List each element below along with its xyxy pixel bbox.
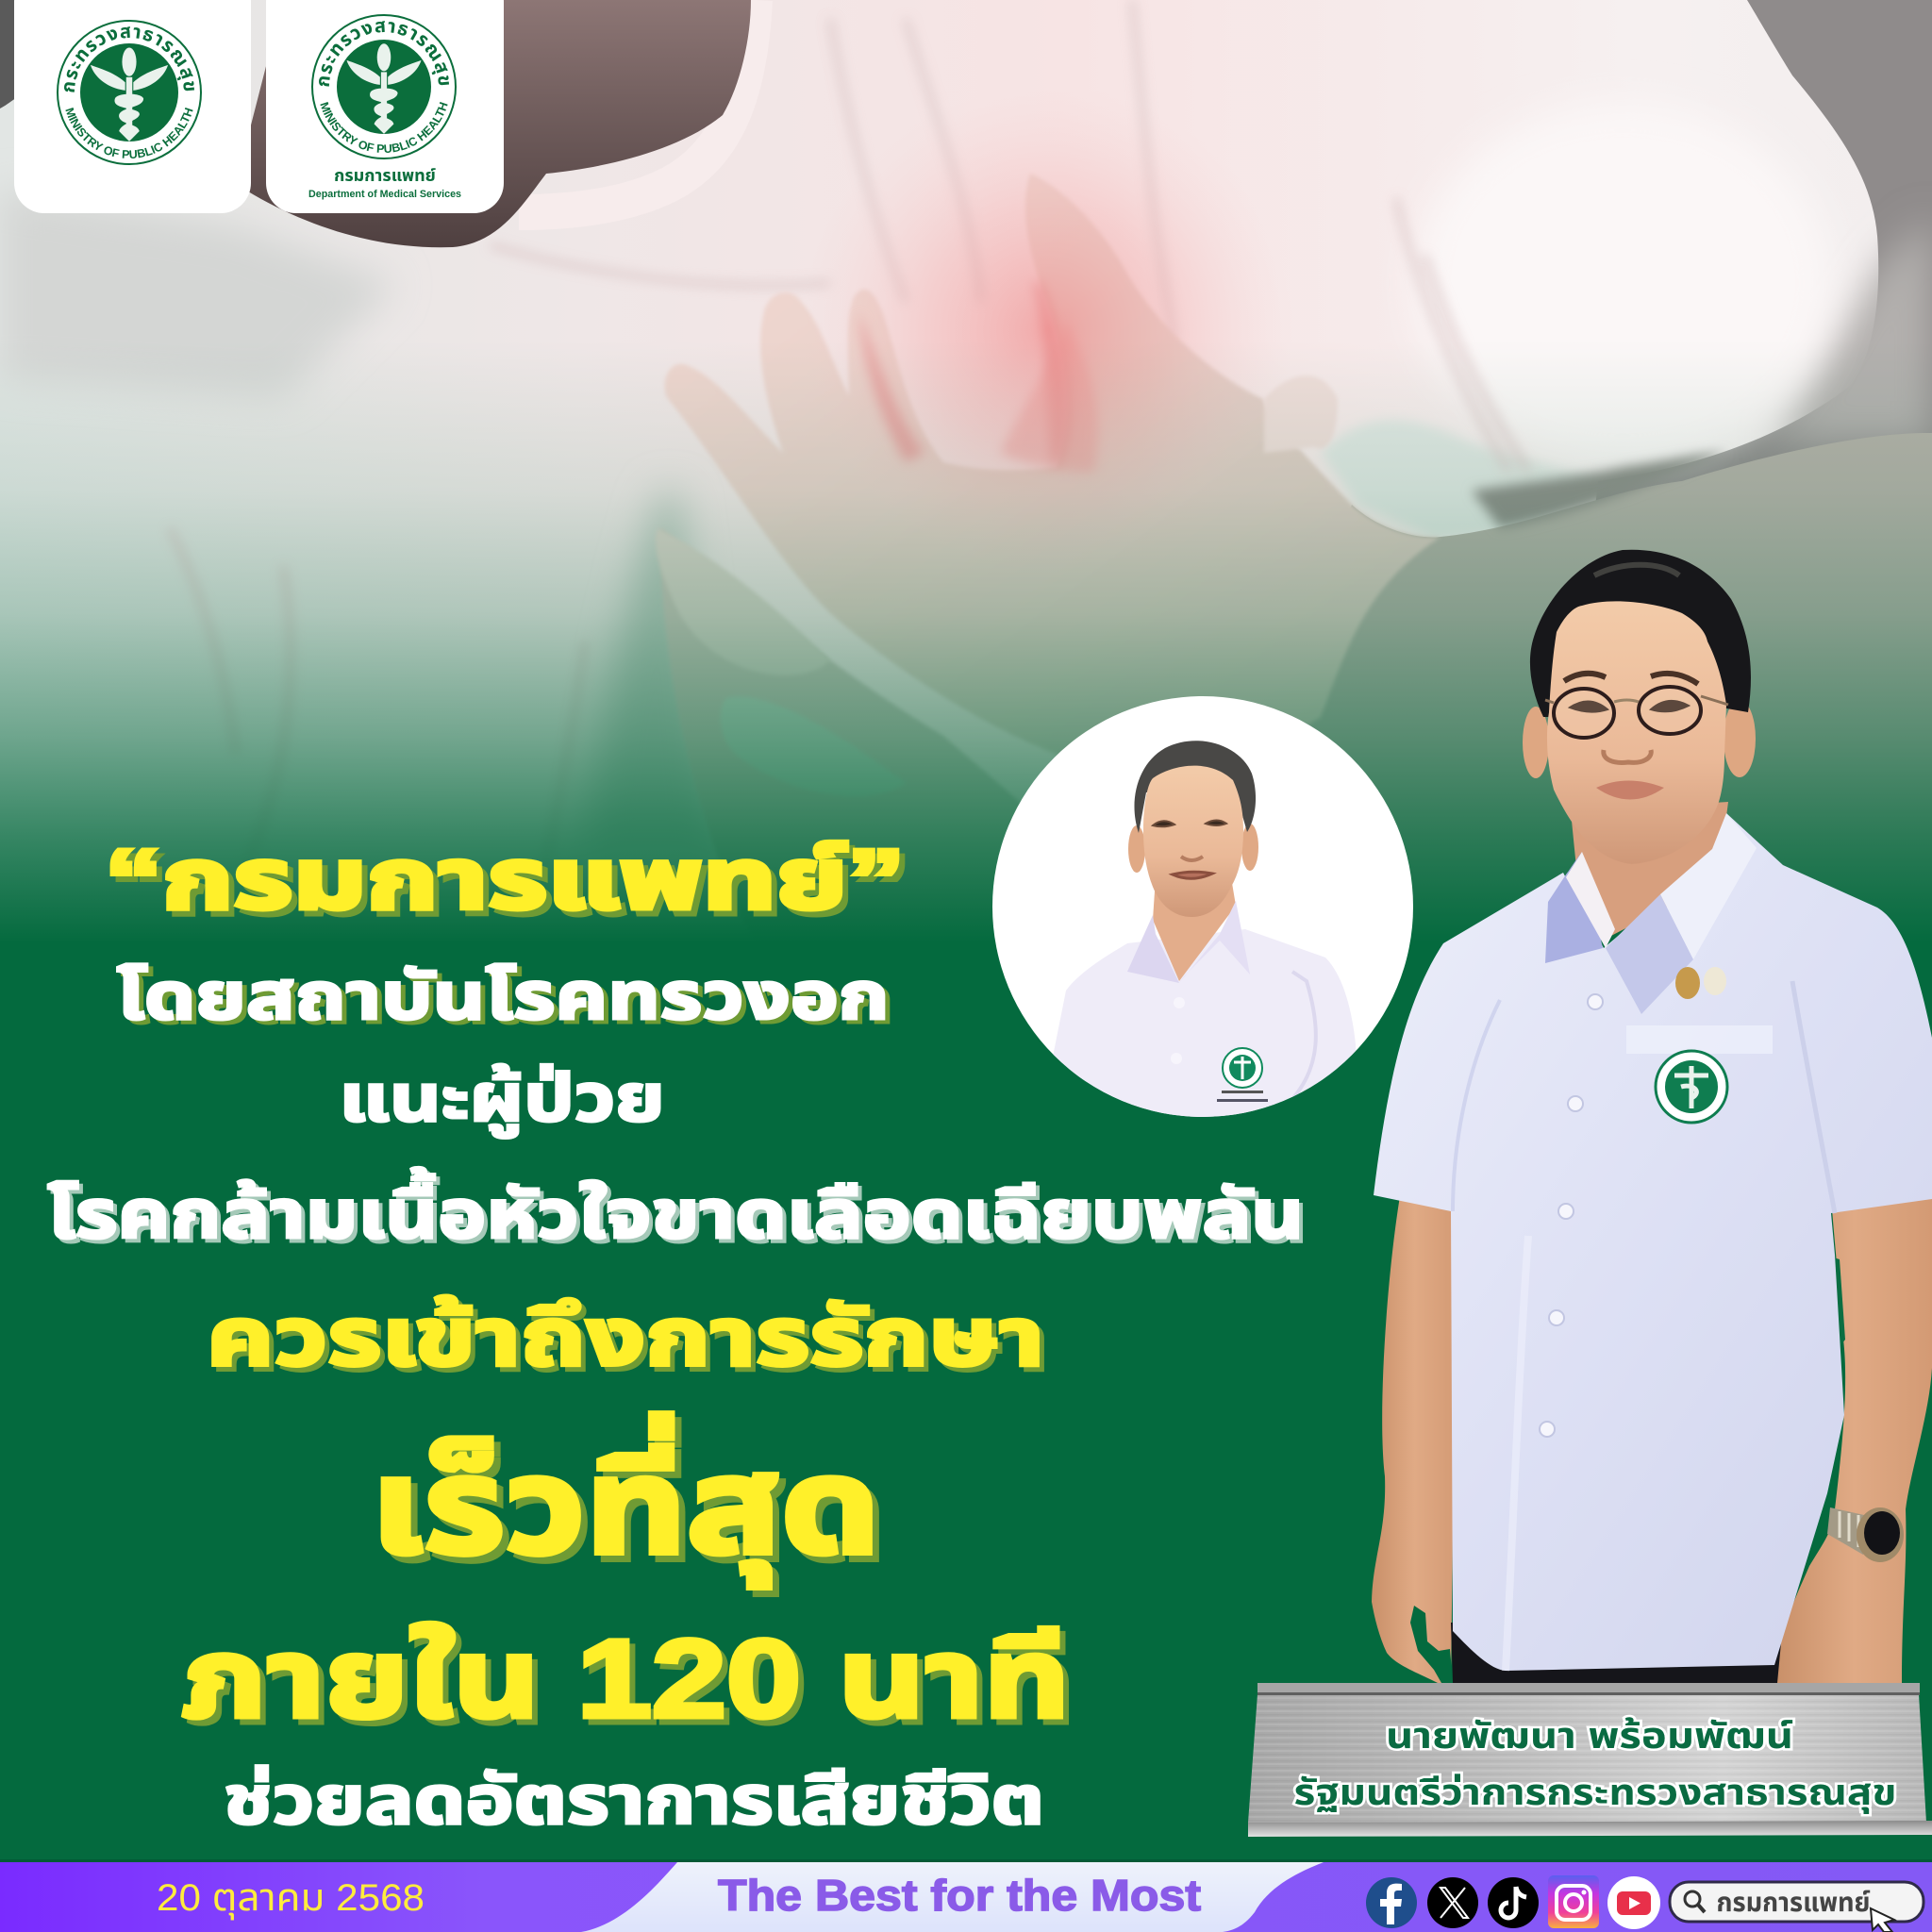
ears (1523, 707, 1549, 778)
eyes (1570, 701, 1689, 712)
line: within 120 minutes: ภายใน 120 นาที (187, 1623, 1075, 1747)
lips (1173, 872, 1212, 878)
shirt logo (1656, 1051, 1727, 1123)
hair (1530, 550, 1751, 717)
arms (1776, 1191, 1932, 1683)
line: should access treatment: ควรเข้าถึงการรักษา (207, 1292, 1044, 1383)
pocket flap (1626, 1025, 1773, 1054)
shirt (1053, 929, 1357, 1117)
placket shadow (1606, 894, 1693, 1014)
line: within 120 minutes: ภายใน 120 นาที (181, 1617, 1070, 1741)
line: condition: โรคกล้ามเนื้อหัวใจขาดเลือดเฉียบพลัน (47, 1167, 1304, 1253)
minister title: รัฐมนตรีว่าการกระทรวงสาธารณสุข (1294, 1774, 1896, 1814)
shirt logo (1223, 1048, 1262, 1088)
department name Thai: กรมการแพทย์ (334, 166, 436, 185)
face (1547, 601, 1726, 864)
shirt folds (170, 0, 1528, 906)
sleeve seams (1453, 1000, 1500, 1211)
grey backdrop right of sleeve (1547, 0, 1932, 943)
forearm (1132, 433, 1932, 943)
collar (1127, 915, 1179, 983)
logo: ministry seal: MINISTRY OF PUBLIC HEALTH (65, 108, 193, 158)
green gap near right arm (1824, 1255, 1845, 1349)
soft shirt fold at lower left (585, 491, 717, 849)
eyes (1153, 821, 1226, 826)
line: should access treatment: ควรเข้าถึงการรักษา (211, 1297, 1049, 1388)
line: condition (47, 1167, 1307, 1257)
nose (1181, 857, 1203, 860)
logo card: Department of Medical Services (266, 0, 504, 213)
pins (1675, 967, 1700, 999)
line: advises patients: แนะผู้ป่วย (340, 1061, 664, 1138)
watch (1827, 1507, 1904, 1562)
portrait circle: department director (992, 696, 1413, 1132)
hand palm (665, 174, 1441, 774)
portrait: minister (1372, 550, 1932, 1683)
headline: department name (105, 833, 910, 933)
collar ribbing (519, 0, 755, 212)
department name English: Department of Medical Services (308, 189, 461, 200)
line: institute: โดยสถาบันโรคทรวงอก (117, 959, 889, 1033)
footer bar (0, 1859, 1932, 1932)
neck (1571, 802, 1728, 939)
search box: กรมการแพทย์ (1717, 1888, 1871, 1917)
buttons (1540, 994, 1603, 1437)
lower fingers (656, 528, 830, 675)
minister name: นายพัฒนา พร้อมพัฒน์ (1386, 1717, 1793, 1757)
icon: facebook (1366, 1877, 1417, 1928)
logo: department seal (311, 14, 457, 159)
line: fastest: เร็วที่สุด (377, 1419, 887, 1594)
icon: X (1427, 1877, 1478, 1928)
slogan band (581, 1862, 1324, 1932)
buttons (1174, 997, 1185, 1008)
logo: ministry seal (57, 20, 202, 165)
collar right (1660, 813, 1757, 959)
gap in left hand (1410, 1606, 1453, 1683)
eyebrows (1564, 674, 1698, 684)
shirt sleeve highlight (1415, 104, 1830, 462)
line: fastest (371, 1412, 887, 1594)
pain glow (802, 85, 1292, 575)
headline: department name: “กรมการแพทย์” (105, 833, 905, 927)
search box (1670, 1882, 1924, 1922)
slogan: The Best for the Most (718, 1871, 1201, 1920)
lower arm in shade (660, 528, 1132, 943)
logo: department seal: กระทรวงสาธารณสุข (319, 21, 449, 87)
gaps between fingers (858, 283, 1071, 467)
logo: department seal: MINISTRY OF PUBLIC HEALTH (320, 102, 448, 153)
logo: ministry seal: กระทรวงสาธารณสุข (64, 26, 194, 92)
lips (1596, 781, 1664, 800)
glasses (1545, 687, 1728, 738)
trousers (1451, 1623, 1783, 1683)
logo card: Ministry of Public Health (14, 0, 251, 213)
gap between sleeve and forearm (1472, 453, 1726, 528)
name plate (1248, 1683, 1932, 1837)
icon: tiktok (1488, 1877, 1539, 1928)
date: 20 ตุลาคม 2568 (157, 1877, 425, 1920)
collar left (1545, 852, 1603, 963)
line: fastest: เร็วที่สุด (371, 1412, 880, 1588)
hair (1134, 741, 1256, 833)
soft grey shading on left of shirt (0, 189, 396, 396)
ears (1128, 825, 1145, 873)
green fade overlay (0, 0, 1932, 943)
nose (1604, 750, 1651, 762)
headline: department name: “กรมการแพทย์” (110, 839, 910, 933)
icon: cursor (1871, 1908, 1894, 1932)
neck shadow (236, 0, 751, 247)
top-left dark corner (0, 0, 57, 108)
line: institute: โดยสถาบันโรคทรวงอก (121, 963, 894, 1037)
icon: youtube (1607, 1876, 1660, 1929)
face (1143, 766, 1243, 917)
thumb (1264, 375, 1338, 453)
shirt under sleeve (1321, 420, 1604, 538)
icon: instagram (1548, 1875, 1599, 1928)
neck (1153, 877, 1236, 981)
line: condition: โรคกล้ามเนื้อหัวใจขาดเลือดเฉียบพลัน (51, 1171, 1307, 1257)
shirt body (1374, 813, 1932, 1671)
line: reduces mortality: ช่วยลดอัตราการเสียชีวิต (224, 1763, 1044, 1839)
